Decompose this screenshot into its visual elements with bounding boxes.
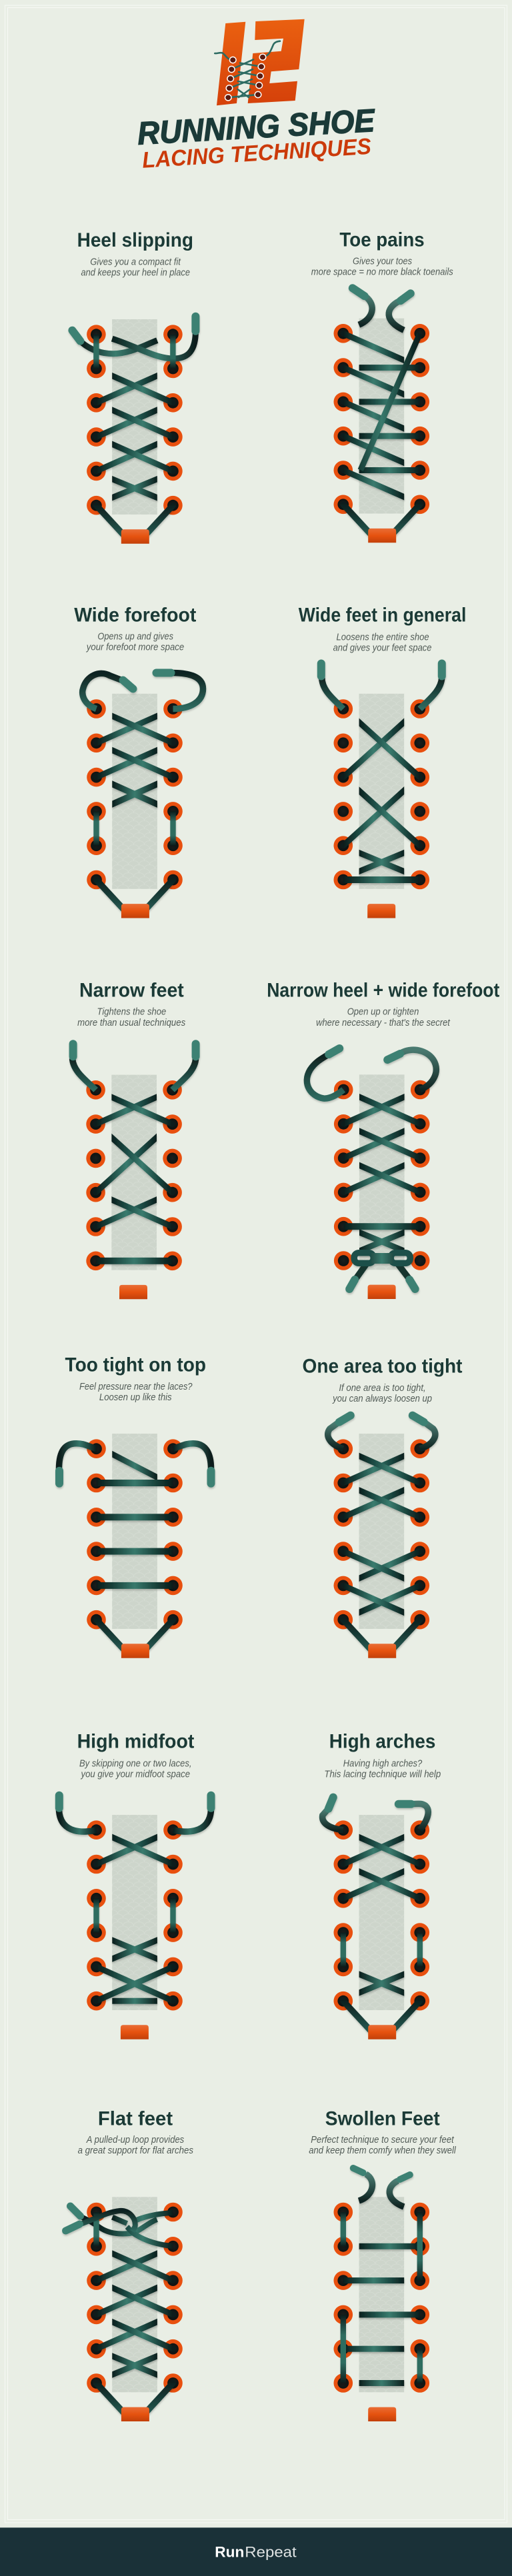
diagram: narrow heel and wide forefoot lacing <box>307 1048 436 1299</box>
footer logo: RunRepeat: Run <box>215 2544 244 2561</box>
heading: Wide feet in general <box>299 604 466 626</box>
toe cap <box>368 2407 396 2421</box>
description: Tightens the shoe <box>97 1007 166 1018</box>
panel: One area too tight <box>303 1355 463 1658</box>
toe cap <box>121 529 149 544</box>
heading: One area too tight <box>303 1355 463 1377</box>
laces <box>65 2206 173 2413</box>
heading: Flat feet <box>98 2107 173 2130</box>
description: more space = no more black toenails <box>311 267 453 277</box>
footer logo: RunRepeat <box>215 2544 297 2561</box>
toe cap <box>121 2025 149 2039</box>
tongue <box>112 694 157 889</box>
subtitle: Lacing Techniques: LACING TECHNIQUES <box>141 134 372 173</box>
toe cap <box>368 529 396 543</box>
diagram: narrow feet lacing <box>73 1044 196 1299</box>
laces <box>73 1044 196 1264</box>
toe cap <box>119 1285 147 1299</box>
laces <box>59 1444 211 1650</box>
description <box>324 1758 441 1780</box>
footer bar <box>0 2527 512 2576</box>
heading: Swollen Feet <box>325 2107 440 2130</box>
eyelets <box>87 2203 183 2393</box>
panel: Flat feet <box>65 2107 193 2421</box>
toe cap <box>368 1285 396 1299</box>
panel: Too tight on top <box>59 1354 211 1658</box>
description: more than usual techniques <box>77 1018 185 1028</box>
description <box>333 632 432 653</box>
tongue <box>112 1434 157 1629</box>
description: Feel pressure near the laces? <box>79 1382 193 1392</box>
heading: Narrow feet <box>79 980 184 1002</box>
numeral 2 <box>248 19 305 103</box>
eyelets <box>333 1820 429 2010</box>
laces <box>328 1416 435 1650</box>
tongue <box>112 1815 157 2010</box>
title: Running Shoe: RUNNING SHOE <box>137 103 377 152</box>
description <box>79 1758 192 1780</box>
description <box>311 256 453 277</box>
panel: High midfoot <box>59 1730 211 2039</box>
diagram: wide forefoot lacing <box>83 673 203 918</box>
eyelets <box>333 1439 429 1629</box>
toe cap <box>368 1644 396 1658</box>
laces <box>307 1048 436 1289</box>
description: you give your midfoot space <box>81 1769 190 1780</box>
eyelets <box>333 324 429 514</box>
description: Gives your toes <box>353 256 412 267</box>
eyelets <box>334 1080 429 1270</box>
panel: Heel slipping <box>72 229 195 544</box>
heading: Too tight on top <box>65 1354 206 1376</box>
description: A pulled-up loop provides <box>86 2135 184 2145</box>
tongue <box>112 2197 157 2392</box>
description: Opens up and gives <box>97 631 173 642</box>
diagram: heel slipping lacing <box>72 317 195 544</box>
description <box>77 1007 185 1028</box>
toe cap <box>121 904 149 918</box>
panel: Swollen Feet <box>309 2107 456 2421</box>
description <box>316 1007 451 1028</box>
tongue <box>359 1074 405 1270</box>
description <box>309 2135 456 2156</box>
panel: Toe pains <box>311 229 453 543</box>
diagram: high arches lacing <box>323 1798 429 2039</box>
laces <box>72 317 195 536</box>
numeral 1 <box>217 22 245 105</box>
description: you can always loosen up <box>332 1394 432 1404</box>
tongue <box>359 319 404 514</box>
eyelets <box>87 1439 183 1629</box>
toe cap <box>367 904 395 918</box>
eyelets <box>333 699 429 889</box>
tongue <box>359 694 404 889</box>
description: Loosen up like this <box>99 1392 172 1403</box>
panel: Wide forefoot <box>74 604 203 918</box>
tongue <box>359 2197 404 2392</box>
laces <box>59 1796 211 2004</box>
logo eyelets <box>225 54 266 101</box>
laces <box>343 288 420 535</box>
description <box>79 1382 193 1403</box>
description: Having high arches? <box>343 1758 423 1769</box>
description: where necessary - that's the secret <box>316 1018 451 1028</box>
diagram: too tight on top lacing <box>59 1434 211 1658</box>
toe cap <box>121 1644 149 1658</box>
header: logo and title <box>137 19 377 173</box>
heading: Toe pains <box>339 229 425 251</box>
logo lace <box>215 41 280 97</box>
diagram: swollen feet lacing <box>333 2168 429 2421</box>
diagram: toe pains lacing <box>333 288 429 543</box>
tongue <box>112 319 157 515</box>
diagram: one area too tight lacing <box>328 1416 435 1658</box>
logo: lace-up number 12 <box>215 19 305 105</box>
description: If one area is too tight, <box>339 1383 426 1394</box>
tongue <box>359 1434 404 1629</box>
footer logo: RunRepeat: Repeat <box>245 2544 297 2561</box>
tongue <box>111 1075 157 1270</box>
laces <box>341 2168 423 2386</box>
eyelets <box>87 325 183 515</box>
description: a great support for flat arches <box>78 2145 193 2156</box>
eyelets <box>86 1080 182 1270</box>
diagram: high midfoot lacing <box>59 1796 211 2039</box>
description: Loosens the entire shoe <box>336 632 429 643</box>
panel: Wide feet in general <box>299 604 466 918</box>
description: Open up or tighten <box>347 1007 419 1018</box>
heading: High midfoot <box>77 1730 194 1752</box>
description: your forefoot more space <box>86 643 184 653</box>
description <box>86 631 184 653</box>
description: By skipping one or two laces, <box>79 1758 192 1769</box>
eyelets <box>87 699 183 889</box>
laces <box>321 664 442 883</box>
description: Gives you a compact fit <box>90 257 181 267</box>
description: and keep them comfy when they swell <box>309 2145 456 2156</box>
panel: Narrow heel + wide forefoot <box>267 980 499 1299</box>
panel: Narrow feet <box>73 980 196 1299</box>
diagram: wide feet lacing <box>321 664 442 918</box>
toe cap <box>368 2025 396 2039</box>
toe cap <box>121 2407 149 2421</box>
description: and keeps your heel in place <box>81 267 190 278</box>
description <box>81 257 190 278</box>
heading: Heel slipping <box>77 229 193 251</box>
laces <box>83 673 203 910</box>
description <box>332 1383 432 1404</box>
diagram: flat feet lacing <box>65 2197 183 2421</box>
description <box>78 2135 193 2156</box>
panel: High arches <box>323 1730 441 2039</box>
heading: Wide forefoot <box>74 604 196 626</box>
tongue <box>359 1815 404 2010</box>
heading: High arches <box>329 1730 435 1752</box>
description: and gives your feet space <box>333 643 432 653</box>
eyelets <box>333 2203 429 2393</box>
description: This lacing technique will help <box>324 1769 441 1780</box>
laces <box>323 1798 428 2031</box>
eyelets <box>87 1820 183 2010</box>
description: Perfect technique to secure your feet <box>311 2135 455 2145</box>
